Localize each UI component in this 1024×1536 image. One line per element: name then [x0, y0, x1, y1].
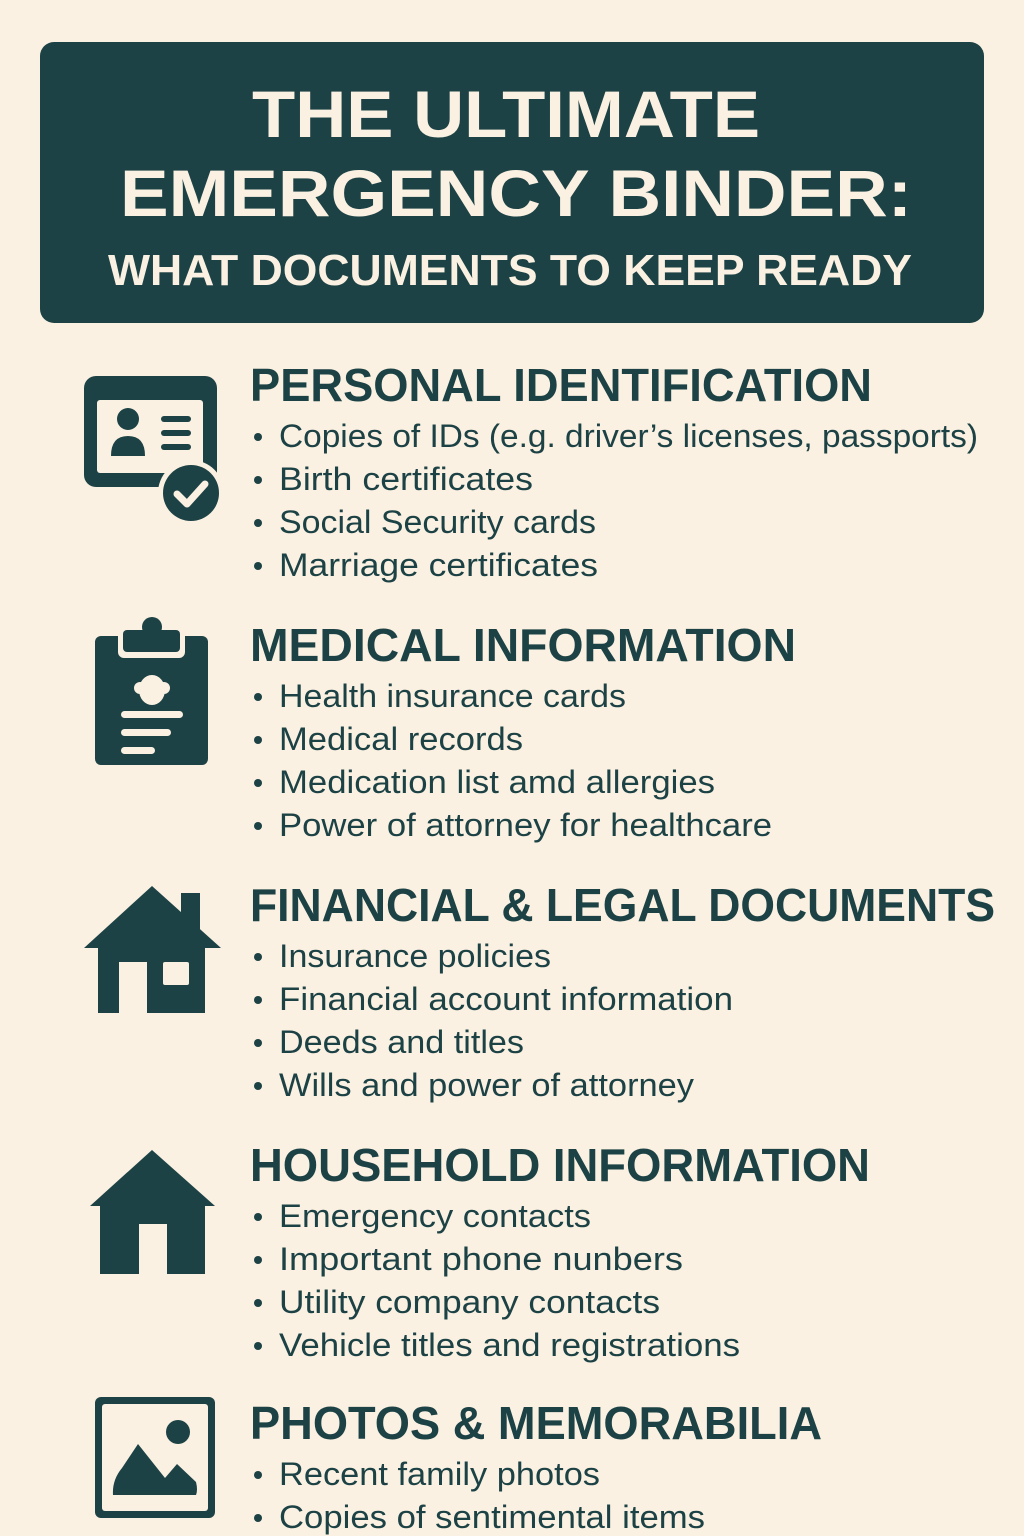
bullet list: Important phone nunbers	[279, 1241, 683, 1277]
section: photos & memorabilia	[95, 1397, 822, 1535]
icon: ID card with check	[84, 376, 224, 526]
heading: HOUSEHOLD INFORMATION	[250, 1139, 870, 1191]
heading: PHOTOS & MEMORABILIA	[250, 1397, 822, 1449]
bullet list: Copies of sentimental items	[279, 1499, 705, 1535]
bullet list: Medical records	[279, 721, 523, 757]
title line 1: THE ULTIMATE	[252, 77, 760, 151]
title line 2: EMERGENCY BINDER:	[120, 156, 912, 230]
section: financial & legal	[84, 879, 995, 1103]
section: medical information	[95, 617, 796, 843]
bullet list: Recent family photos	[279, 1456, 600, 1492]
icon: house	[90, 1150, 215, 1274]
icon: house with chimney	[84, 886, 221, 1013]
icon: medical clipboard	[95, 617, 208, 765]
bullet list: Birth certificates	[279, 461, 533, 497]
bullet list	[254, 678, 772, 843]
bullet list: Health insurance cards	[279, 678, 626, 714]
bullet list: Social Security cards	[279, 504, 596, 540]
bullet list: Emergency contacts	[279, 1198, 591, 1234]
bullet list	[254, 1198, 740, 1363]
bullet list	[254, 938, 733, 1103]
bullet list	[254, 1456, 705, 1535]
bullet list: Copies of IDs (e.g. driver’s licenses, passports)	[279, 418, 978, 454]
bullet list: Power of attorney for healthcare	[279, 807, 772, 843]
bullet list	[254, 418, 978, 583]
bullet list: Medication list amd allergies	[279, 764, 715, 800]
icon: photo frame	[95, 1397, 215, 1518]
bullet list: Marriage certificates	[279, 547, 598, 583]
section: personal identification	[84, 359, 978, 583]
bullet list: Wills and power of attorney	[279, 1067, 694, 1103]
bullet list: Financial account information	[279, 981, 733, 1017]
bullet list: Utility company contacts	[279, 1284, 660, 1320]
heading: PERSONAL IDENTIFICATION	[250, 359, 872, 411]
heading: FINANCIAL & LEGAL DOCUMENTS	[250, 879, 995, 931]
bullet list: Vehicle titles and registrations	[279, 1327, 740, 1363]
section: household information	[90, 1139, 870, 1363]
heading: MEDICAL INFORMATION	[250, 619, 796, 671]
bullet list: Insurance policies	[279, 938, 551, 974]
title banner	[40, 42, 984, 323]
subtitle: WHAT DOCUMENTS TO KEEP READY	[108, 246, 912, 295]
bullet list: Deeds and titles	[279, 1024, 524, 1060]
